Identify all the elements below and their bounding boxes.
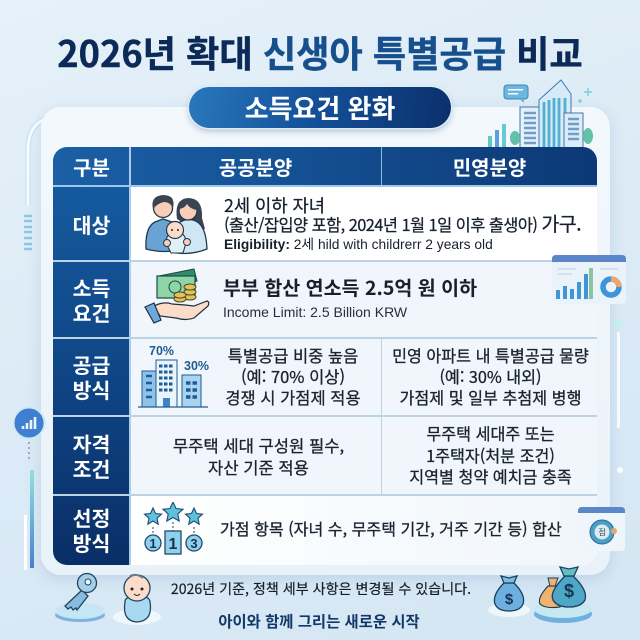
- row label: 소득요건: 요건: [73, 296, 110, 326]
- icon: small window badge: 점: [598, 527, 606, 538]
- column 1 background: [53, 186, 130, 565]
- row 1 background: [130, 186, 597, 261]
- public supply text: (예: 70% 이상): [241, 364, 345, 388]
- public eligibility text: [173, 432, 344, 478]
- comparison table: [53, 147, 597, 565]
- icon: city buildings: [488, 79, 593, 147]
- header: 공공분양: 공공분양: [219, 152, 292, 181]
- row label: 자격조건: [73, 428, 110, 482]
- public supply text: 특별공급 비중 높음: [228, 343, 358, 367]
- icon: key on pedestal: [55, 572, 105, 622]
- tagline: 아이와 함께 그리는 새로운 시작: [218, 610, 420, 632]
- row label: 공급방식: [73, 349, 110, 404]
- income text: 부부 합산 연소득 2.5억 원 이하: [223, 272, 477, 301]
- target text: [224, 192, 581, 252]
- public eligibility text: 무주택 세대 구성원 필수,: [173, 432, 344, 456]
- icon: stars ranking: [143, 502, 204, 555]
- selection text: 가점 항목 (자녀 수, 무주택 기간, 거주 기간 등) 합산: [220, 516, 562, 540]
- row label: 소득요건: [73, 272, 110, 326]
- target text: (출산/잡입양 포함, 2024년 1월 1일 이후 출생아) 가구.: [224, 208, 581, 237]
- header: 민영분양: 민영분양: [453, 152, 526, 181]
- private supply text: 가점제 및 일부 추첨제 병행: [400, 385, 581, 409]
- target text: 2세 이하 자녀: [224, 192, 325, 218]
- icon: left chart badge: [12, 406, 46, 440]
- icon: buildings 70% 30%: [138, 344, 209, 408]
- icon: buildings 70% 30%: 30%: [184, 359, 209, 373]
- icon: baby: [113, 574, 161, 625]
- private eligibility text: 지역별 청약 예치금 충족: [409, 464, 572, 488]
- title: 2026년 확대 신생아 특별공급 비교: [57, 26, 583, 78]
- icon: stars ranking: 1: [169, 536, 178, 553]
- private supply text: (예: 30% 내외): [439, 364, 542, 388]
- header row: [53, 147, 597, 186]
- header: 구분: 구분: [73, 152, 110, 181]
- row label: 공급방식: 방식: [73, 374, 110, 404]
- target text: Eligibility: 2세 hild with childrerr 2 years old: [224, 237, 493, 252]
- icon: money bags on pedestal: [534, 566, 592, 623]
- income text: Income Limit: 2.5 Billion KRW: [223, 304, 407, 320]
- income text: [223, 272, 477, 320]
- row label: 대상: 대상: [73, 208, 110, 238]
- private eligibility text: 1주택자(처분 조건): [426, 443, 555, 467]
- note text: 2026년 기준, 정책 세부 사항은 변경될 수 있습니다.: [171, 579, 471, 599]
- icon: family: [145, 195, 208, 254]
- icon: buildings 70% 30%: 70%: [149, 344, 174, 358]
- private supply text: 민영 아파트 내 특별공급 물량: [392, 343, 589, 367]
- icon: stars ranking: 3: [190, 536, 198, 551]
- public supply text: 경쟁 시 가점제 적용: [225, 385, 361, 409]
- row 5 background: [130, 495, 597, 565]
- icon: small window badge: [578, 507, 625, 551]
- public supply text: [225, 343, 361, 409]
- icon: money bags on pedestal: $: [564, 581, 574, 601]
- row label: 자격조건: 조건: [73, 452, 110, 482]
- icon: money in hand: [144, 268, 210, 324]
- private supply text: [392, 343, 589, 409]
- public eligibility text: 자산 기준 적용: [208, 454, 309, 478]
- row label: 선정방식: 선정: [73, 502, 110, 532]
- row label: 자격조건: 자격: [73, 428, 110, 458]
- row label: 선정방식: 방식: [73, 527, 110, 557]
- private eligibility text: 무주택 세대주 또는: [426, 421, 555, 445]
- pill heading: 소득요건 완화: [245, 89, 395, 126]
- row label: 공급방식: 공급: [73, 349, 110, 379]
- row label: 소득요건: 소득: [73, 272, 110, 302]
- private eligibility text: [409, 421, 572, 488]
- icon: money bag small: [488, 575, 530, 617]
- icon: money bag small: $: [505, 591, 514, 608]
- icon: dashboard card: [552, 255, 626, 304]
- row label: 선정방식: [73, 502, 110, 557]
- main card panel: [41, 107, 610, 575]
- icon: stars ranking: 1: [149, 536, 157, 551]
- pill heading: [189, 87, 451, 128]
